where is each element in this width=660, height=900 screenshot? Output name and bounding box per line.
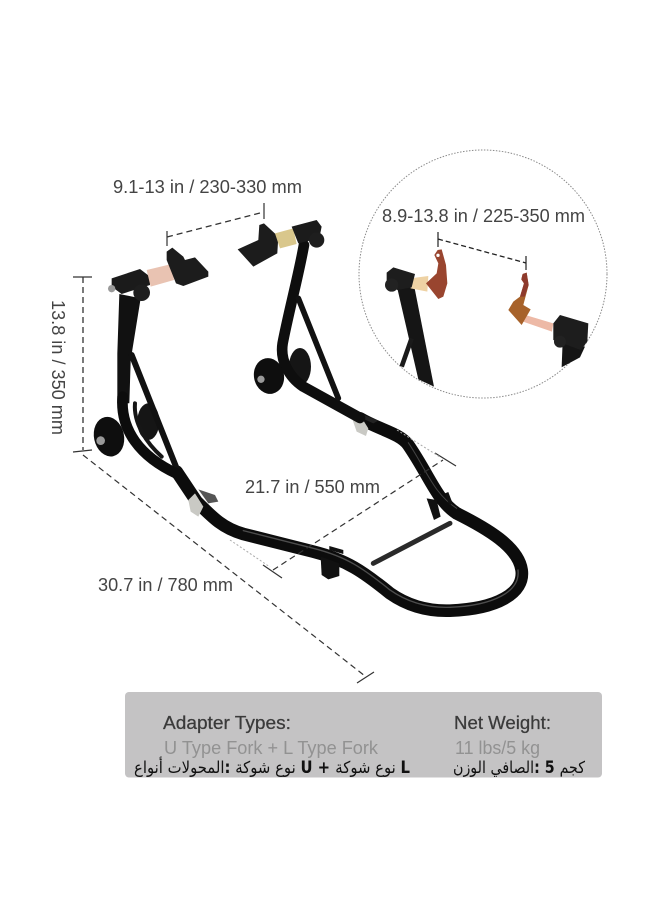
dimension: top width — [113, 177, 302, 246]
detail left arm — [385, 249, 447, 387]
black clips — [321, 557, 339, 579]
dimension: width — [230, 430, 456, 578]
right knob — [309, 232, 324, 248]
right strut — [298, 298, 338, 398]
left bolt and knob — [108, 285, 115, 292]
adapter types value: U Type Fork + L Type Fork — [164, 737, 379, 758]
net weight arabic: الوزن‎ الصافي‎: 5 كجم — [453, 758, 585, 778]
adapter types arabic: أنواع‎ المحولات‎: شوكة‎ نوع‎ U + شوكة‎ نوع‎ L — [134, 756, 410, 778]
front right wheel — [251, 355, 287, 397]
detail label: 8.9-13.8 in / 225-350 mm — [382, 206, 585, 226]
net weight value: 11 lbs/5 kg — [455, 737, 540, 758]
dimension: length: 30.7 in / 780 mm — [98, 575, 233, 595]
detail dimension line — [438, 232, 526, 270]
specification panel — [125, 692, 602, 778]
net weight heading: Net Weight: — [454, 712, 551, 733]
right extension bar — [275, 228, 297, 248]
dimension: width: 21.7 in / 550 mm — [245, 477, 380, 497]
dimension: height — [48, 277, 92, 452]
motorcycle stand — [90, 220, 522, 611]
left U adapter — [167, 248, 208, 286]
right post — [282, 245, 360, 418]
right L adapter — [238, 223, 278, 267]
silver clamps — [188, 493, 203, 517]
rear wheels — [137, 403, 159, 440]
dimension: top width: 9.1-13 in / 230-330 mm — [113, 177, 302, 197]
front left wheel — [90, 414, 128, 459]
left struts — [132, 355, 177, 468]
detail right arm — [508, 273, 588, 367]
right block — [292, 220, 322, 243]
left post — [117, 294, 141, 403]
left extension bar — [147, 264, 174, 287]
left block — [112, 269, 150, 294]
dimension: length — [83, 455, 374, 683]
stand upper section — [90, 220, 360, 474]
stand lower frame — [177, 413, 522, 611]
detail circle — [359, 150, 607, 398]
adapter types heading: Adapter Types: — [163, 712, 291, 733]
clamp hardware — [198, 489, 218, 503]
dimension: height: 13.8 in / 350 mm — [48, 300, 68, 435]
